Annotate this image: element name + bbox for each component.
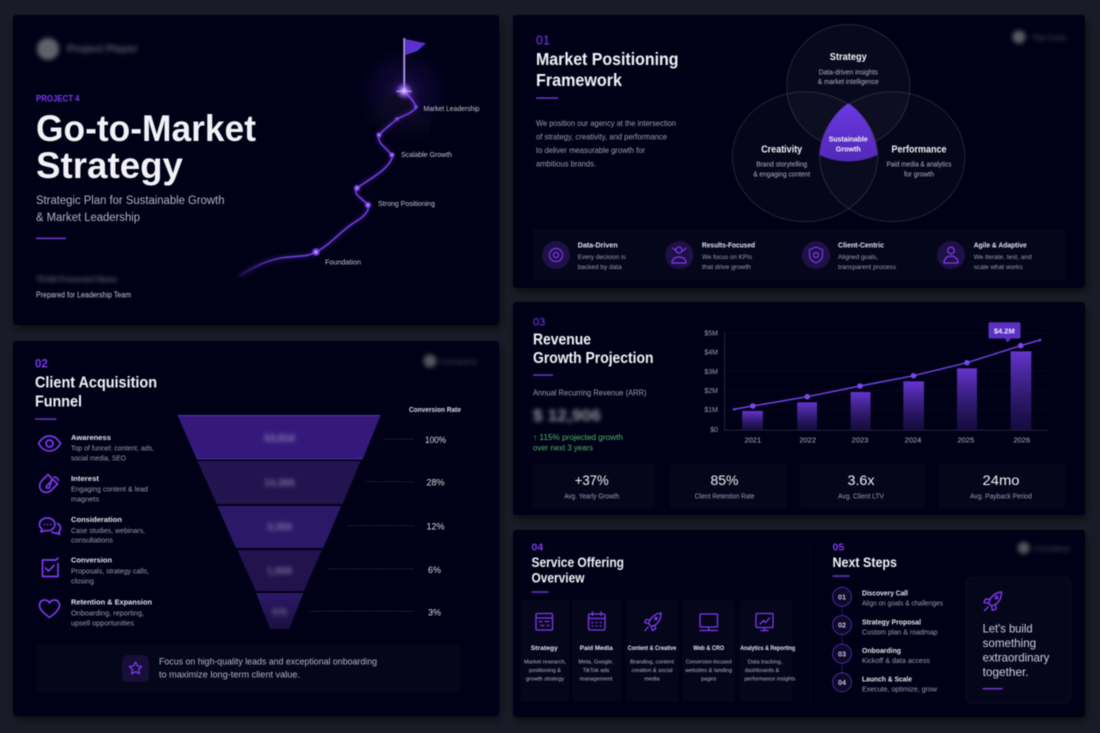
x axis labels: 2021 — [744, 436, 761, 444]
panel: title slide — [13, 15, 499, 325]
x axis labels: 2022 — [799, 436, 816, 444]
section number 04: 04 — [532, 541, 543, 553]
conversion rate column: 12% — [426, 522, 445, 532]
y axis labels: $5M — [704, 330, 718, 338]
revenue chart — [704, 322, 1048, 444]
logo placeholder: Project Player — [67, 44, 138, 55]
closing message: something — [983, 636, 1036, 650]
principle: client-centric — [802, 241, 897, 271]
blurred presenter name: TEAM Presented Name — [36, 275, 117, 284]
y axis labels: $2M — [704, 388, 718, 395]
logo placeholder — [1018, 542, 1070, 554]
logo placeholder — [424, 354, 477, 368]
main title: Go-to-Market — [36, 108, 256, 149]
service: web and CRO: Web & CRO — [693, 645, 724, 652]
closing underline — [983, 688, 1003, 690]
closing message: Let's build — [983, 621, 1033, 635]
service: strategy: Market research, — [524, 660, 566, 666]
conversion rate column: 6% — [428, 565, 441, 575]
closing message — [983, 621, 1049, 679]
description: of strategy, creativity, and performance — [536, 132, 667, 142]
eyebrow: project number: PROJECT 4 — [36, 94, 80, 104]
stat: retention: Client Retention Rate — [694, 493, 755, 500]
section heading: Market Positioning — [536, 49, 678, 69]
section number: 03 — [533, 317, 545, 329]
conversion rate column — [310, 405, 461, 617]
service: analytics and reporting — [740, 600, 796, 702]
description — [536, 118, 676, 169]
ARR block: over next 3 years — [533, 443, 593, 452]
venn diagram — [732, 24, 965, 222]
step 4: Execute, optimize, grow — [862, 687, 938, 694]
conversion rate column: Conversion Rate — [409, 405, 461, 414]
principle: results-focused: Results-Focused — [702, 241, 755, 250]
step 1: Discovery Call — [862, 589, 908, 598]
service: paid media — [572, 600, 622, 702]
venn center label: Sustainable — [829, 135, 868, 144]
y axis labels: $3M — [704, 369, 718, 376]
heading underline — [533, 374, 553, 376]
services heading: Overview — [532, 570, 585, 585]
service: strategy: growth strategy — [526, 676, 564, 682]
y axis labels: $4M — [704, 350, 718, 356]
logo placeholder — [37, 38, 138, 60]
stage: retention and expansion — [40, 598, 152, 628]
service: web and CRO: pages — [701, 676, 717, 682]
x axis labels: 2025 — [957, 436, 974, 444]
title underline — [36, 238, 66, 239]
service: paid media: Meta, Google, — [578, 660, 614, 666]
service: strategy: positioning & — [529, 668, 561, 674]
venn label: strategy: Data-driven insights — [819, 69, 878, 76]
venn center label — [829, 135, 868, 154]
principle: agile and adaptive: Agile & Adaptive — [974, 241, 1027, 250]
bars — [742, 351, 1031, 430]
description: We position our agency at the intersection — [536, 118, 676, 128]
heading underline — [35, 418, 56, 420]
value callout — [988, 322, 1020, 342]
principle: results-focused: We focus on KPIs — [702, 254, 753, 261]
principle: data-driven: Data-Driven — [578, 241, 618, 250]
section heading — [35, 375, 157, 411]
services heading: Service Offering — [532, 555, 624, 570]
service: analytics and reporting: performance insights — [744, 676, 796, 682]
services heading — [532, 555, 624, 585]
stage: conversion: Proposals, strategy calls, — [71, 569, 149, 576]
panel: market positioning framework — [513, 15, 1085, 288]
logo placeholder: Company — [440, 357, 477, 366]
steps timeline — [833, 587, 943, 694]
venn label: creativity: Brand storytelling — [756, 162, 807, 169]
subtitle — [36, 195, 224, 224]
venn center label: Growth — [836, 145, 861, 154]
service: content and creative: media — [644, 676, 660, 682]
principle: agile and adaptive: scale what works — [974, 264, 1023, 271]
icon: rocket — [984, 592, 1002, 610]
principle: client-centric: Aligned goals, — [838, 254, 878, 261]
stat: client LTV: Avg. Client LTV — [838, 493, 884, 500]
main title — [36, 108, 256, 186]
service: analytics and reporting: dashboards & — [745, 668, 780, 674]
step 1: Align on goals & challenges — [862, 600, 943, 607]
service: web and CRO: websites & landing — [684, 668, 732, 674]
venn label: performance: Paid media & analytics — [886, 162, 952, 169]
subtitle: Strategic Plan for Sustainable Growth — [36, 195, 224, 207]
service: content and creative — [626, 600, 679, 702]
venn label: strategy: Strategy — [830, 52, 867, 63]
step 2 — [862, 617, 938, 636]
funnel values (blurred): 14,366 — [264, 478, 295, 489]
principles strip — [533, 229, 1065, 280]
step 3 — [862, 646, 931, 665]
path labels — [325, 104, 480, 266]
stat: payback period — [938, 464, 1065, 508]
service: content and creative: Branding, content — [630, 660, 674, 666]
closing message: extraordinary — [983, 651, 1049, 665]
stat: yearly growth: Avg. Yearly Growth — [564, 493, 619, 500]
heading underline — [536, 97, 558, 99]
stat: client LTV — [800, 464, 925, 508]
service: content and creative: creation & social — [631, 668, 673, 674]
description: to deliver measurable growth for — [536, 145, 645, 155]
stage: consideration: Consideration — [71, 515, 122, 524]
logo placeholder: Top Corp — [1032, 33, 1066, 42]
funnel values (blurred): 1,606 — [267, 566, 292, 577]
section heading: Client Acquisition — [35, 375, 157, 392]
trend line — [734, 340, 1040, 409]
section number 05: 05 — [832, 541, 844, 553]
principle: data-driven: backed by data — [578, 264, 622, 271]
stage: awareness: Awareness — [71, 433, 111, 442]
service: analytics and reporting: Data tracking, — [748, 660, 783, 666]
stage: awareness — [38, 433, 154, 463]
funnel values (blurred): 975 — [272, 607, 287, 617]
stat: client LTV: 3.6x — [848, 472, 874, 488]
stat: yearly growth: +37% — [575, 472, 609, 488]
principle: results-focused — [665, 241, 755, 271]
venn label: creativity: Creativity — [761, 144, 803, 155]
prepared for line: Prepared for Leadership Team — [36, 290, 131, 300]
path labels: Market Leadership — [424, 104, 480, 113]
stat: retention — [670, 464, 787, 508]
funnel chart — [177, 415, 381, 629]
principle: agile and adaptive: We iterate, test, and — [974, 254, 1032, 261]
y axis labels — [704, 330, 718, 434]
x axis labels: 2023 — [852, 436, 868, 444]
step 3: Kickoff & data access — [862, 658, 931, 665]
venn label: performance: for growth — [904, 171, 934, 178]
callout: focus note: Focus on high-quality leads and exceptional onboarding — [159, 656, 377, 666]
funnel values (blurred): 53,816 — [264, 434, 295, 444]
stage: conversion: closing — [71, 579, 94, 586]
service: strategy — [520, 600, 570, 702]
service: paid media: TikTok ads — [583, 668, 609, 674]
principle: results-focused: that drive growth — [702, 264, 751, 271]
step 4: Launch & Scale — [862, 675, 912, 684]
venn label: creativity: & engaging content — [753, 171, 810, 178]
stage: consideration: consultations — [71, 538, 114, 545]
steps timeline: 01 — [838, 592, 846, 601]
subtitle: & Market Leadership — [36, 212, 140, 224]
venn label: performance — [886, 144, 952, 178]
stage: retention and expansion: Onboarding, reporting, — [71, 611, 144, 618]
path labels: Strong Positioning — [378, 199, 435, 208]
service: web and CRO — [682, 600, 735, 702]
venn label: strategy — [818, 52, 879, 86]
closing card — [966, 577, 1071, 703]
stage: interest: magnets — [71, 497, 100, 504]
conversion rate column: 28% — [426, 478, 445, 488]
value callout: $4.2M — [994, 326, 1015, 335]
funnel values (blurred) — [264, 434, 295, 617]
steps timeline: 04 — [838, 678, 846, 687]
principle: data-driven: Every decision is — [578, 254, 626, 261]
principle: agile and adaptive — [937, 241, 1032, 271]
logo placeholder — [1012, 30, 1066, 44]
section heading: Framework — [536, 70, 622, 90]
logo placeholder: Company — [1034, 544, 1070, 553]
panel: revenue growth projection — [513, 302, 1085, 515]
service: analytics and reporting: Analytics & Reporting — [740, 645, 795, 652]
callout: focus note: to maximize long-term client value. — [159, 669, 300, 679]
stage: interest: Engaging content & lead — [71, 487, 148, 494]
service: web and CRO: Conversion-focused — [686, 660, 732, 666]
stat: retention: 85% — [710, 472, 738, 488]
services underline — [532, 591, 548, 593]
stage: consideration — [40, 515, 145, 545]
conversion rate column: 100% — [425, 435, 446, 445]
y axis labels: $1M — [704, 407, 718, 414]
stage: interest: Interest — [71, 474, 100, 483]
principle: data-driven — [542, 241, 626, 271]
venn label: strategy: & market intelligence — [818, 79, 879, 86]
service: paid media: management — [580, 676, 613, 682]
stage: conversion — [42, 556, 149, 586]
section heading — [536, 49, 678, 90]
service: paid media: Paid Media — [580, 645, 613, 652]
stage: retention and expansion: upsell opportunities — [71, 621, 135, 628]
x axis labels — [744, 436, 1030, 444]
path labels: Foundation — [325, 258, 361, 266]
principle: client-centric: transparent process — [838, 264, 897, 271]
stage: retention and expansion: Retention & Expansion — [71, 598, 152, 607]
panel: services and next steps — [513, 530, 1085, 717]
venn label: creativity — [753, 144, 810, 178]
callout: focus note — [36, 644, 460, 693]
stage: consideration: Case studies, webinars, — [71, 528, 145, 535]
stage: interest — [40, 474, 148, 504]
ARR block: $ 12,906 — [533, 406, 601, 425]
ARR block — [533, 388, 647, 452]
step 3: Onboarding — [862, 646, 901, 655]
service: strategy: Strategy — [531, 645, 558, 652]
x axis labels: 2026 — [1013, 436, 1030, 444]
y axis labels: $0 — [710, 427, 718, 434]
principle: client-centric: Client-Centric — [838, 241, 884, 250]
stat: yearly growth — [532, 464, 655, 508]
path labels: Scalable Growth — [401, 150, 452, 159]
ARR block: ↑ 115% projected growth — [533, 433, 623, 442]
conversion rate column: 3% — [428, 607, 441, 617]
section heading: Revenue — [533, 331, 591, 348]
section heading — [533, 331, 654, 367]
main title: Strategy — [36, 145, 183, 186]
illustration: mountain path and flag — [232, 35, 470, 280]
step 1 — [862, 589, 943, 607]
step 2: Strategy Proposal — [862, 617, 921, 626]
section heading: Funnel — [35, 394, 82, 411]
section number: 02 — [35, 358, 48, 370]
next steps heading: Next Steps — [832, 555, 897, 570]
stage: conversion: Conversion — [71, 556, 112, 565]
stat: payback period: 24mo — [982, 472, 1020, 488]
steps timeline: 02 — [838, 621, 846, 630]
ARR block: Annual Recurring Revenue (ARR) — [533, 388, 647, 397]
stage: awareness: social media, SEO — [71, 456, 127, 463]
section heading: Growth Projection — [533, 350, 654, 367]
funnel values (blurred): 3,356 — [267, 522, 292, 533]
venn label: performance: Performance — [892, 144, 947, 155]
x axis labels: 2024 — [905, 436, 921, 444]
closing message: together. — [983, 665, 1029, 679]
section number: 01 — [536, 34, 550, 48]
step 2: Custom plan & roadmap — [862, 629, 938, 636]
description: ambitious brands. — [536, 159, 596, 169]
venn center: sustainable growth — [819, 103, 878, 162]
panel: client acquisition funnel — [13, 341, 499, 716]
step 4 — [862, 675, 938, 694]
next steps underline — [832, 575, 850, 577]
stat: payback period: Avg. Payback Period — [970, 493, 1032, 500]
steps timeline: 03 — [838, 649, 846, 658]
service: content and creative: Content & Creative — [628, 645, 676, 652]
stage: awareness: Top of funnel: content, ads, — [71, 446, 154, 453]
